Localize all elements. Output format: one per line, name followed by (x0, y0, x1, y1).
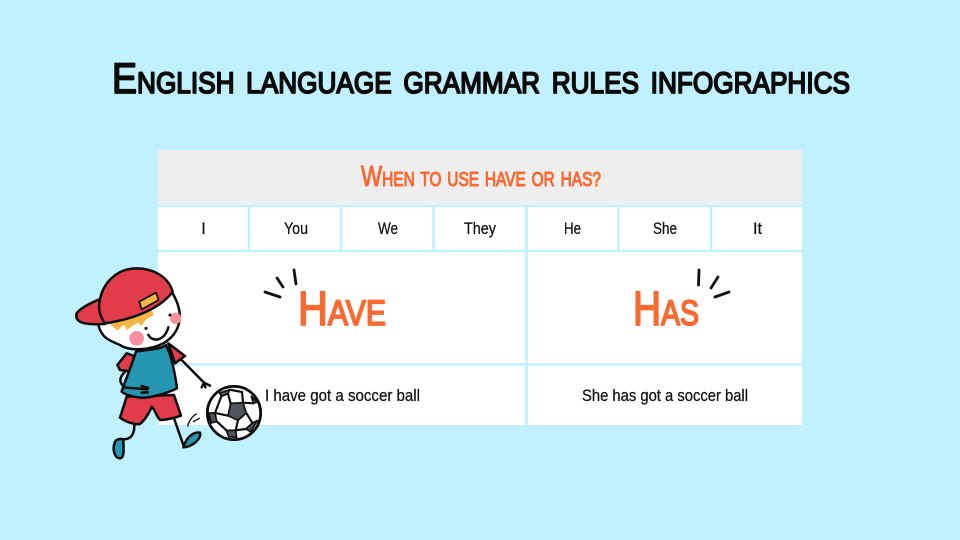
icon: feet (114, 433, 200, 458)
hand on shirt (123, 386, 148, 393)
icon: have emphasis ticks (265, 270, 296, 297)
arm and legs (120, 360, 210, 445)
example: has: She has got a soccer ball (582, 387, 748, 405)
pronoun row: It (753, 220, 762, 238)
pronoun row: She (653, 220, 677, 238)
icon: has emphasis ticks (698, 270, 729, 297)
face (98, 292, 180, 349)
cheeks (129, 313, 181, 346)
heading: has: HAS (633, 283, 699, 336)
title: ENGLISH LANGUAGE GRAMMAR RULES INFOGRAPHICS (112, 55, 850, 103)
pronoun row: You (284, 220, 308, 238)
panel: grammar table (158, 150, 802, 425)
eyes and smile (148, 327, 168, 340)
pronoun row: I (201, 220, 206, 238)
pronoun row (201, 220, 762, 238)
pronoun row: We (378, 220, 398, 238)
sleeves (117, 343, 185, 372)
table heading: WHEN TO USE HAVE OR HAS? (361, 161, 601, 193)
shirt (122, 345, 177, 398)
shorts (120, 395, 181, 424)
heading: have: HAVE (298, 283, 386, 336)
pronoun row: He (564, 220, 581, 238)
icon: soccer ball (207, 386, 261, 440)
cap badge (139, 293, 159, 309)
motion lines (188, 414, 199, 426)
hair (110, 310, 154, 331)
illustration: boy kicking ball (76, 268, 261, 458)
example: have: I have got a soccer ball (265, 387, 420, 405)
table heading (158, 150, 802, 205)
pronoun row: They (464, 220, 497, 238)
cap brim (76, 299, 105, 324)
cap crown (99, 268, 173, 323)
